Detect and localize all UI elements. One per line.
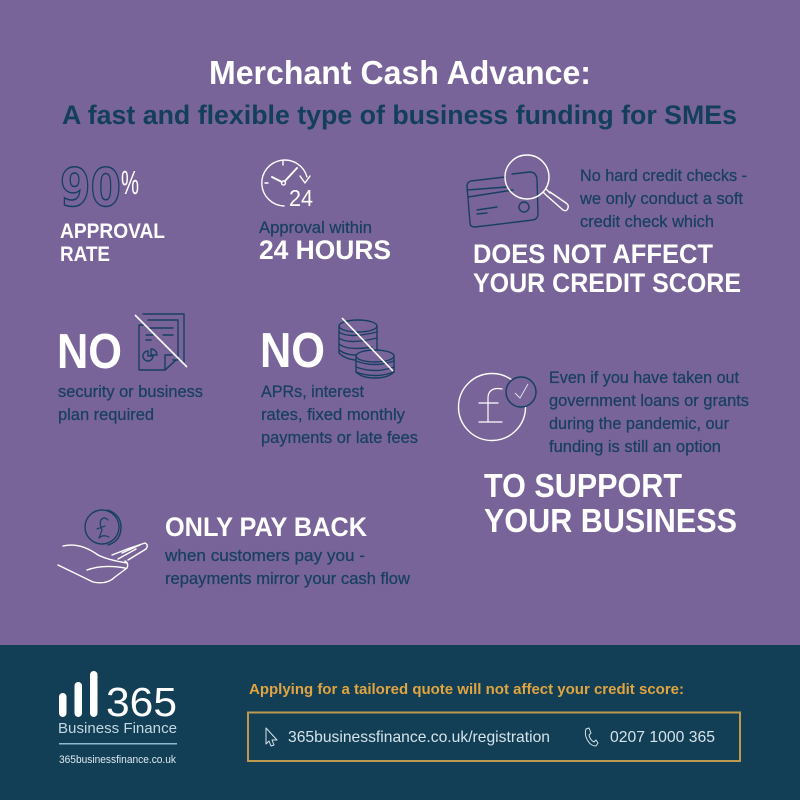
logo: 365 Business Finance [58, 671, 177, 766]
logo: 365 Business Finance: 365 [106, 679, 177, 725]
text: when customers pay you [164, 546, 411, 588]
heading: tailored quote: Applying for a tailored quote will not affect your credit score: [249, 681, 684, 698]
text: when customers pay you: when customers pay you - [164, 546, 365, 565]
heading: no: NO [260, 324, 325, 378]
text: security or business plan required: security or business [58, 382, 203, 401]
icon: hand with coin [58, 510, 147, 583]
subtitle: A fast and flexible type of business funding for SMEs [62, 100, 737, 130]
heading: does not affect your credit score: DOES NOT AFFECT [473, 239, 713, 269]
text: APRs, interest, fees [261, 382, 418, 447]
icon: card and magnifying glass [467, 155, 568, 227]
icon: crossed coins [339, 318, 394, 378]
panel: 90% approval rate [60, 158, 165, 266]
title: Merchant Cash Advance: [209, 54, 591, 91]
panel: credit score [467, 155, 747, 298]
text: even if you have taken out [549, 368, 749, 456]
text: even if you have taken out: funding is still an option [549, 437, 721, 456]
panel: government loans [458, 368, 749, 539]
text: security or business plan required: plan required [58, 405, 154, 424]
text: no hard credit checks [579, 166, 747, 231]
stat: 90%: % [121, 164, 139, 201]
icon: phone [585, 728, 598, 746]
text: approval within: Approval within [259, 218, 372, 237]
icon: pound with check [458, 374, 536, 440]
text: security or business plan required [58, 382, 203, 424]
text: even if you have taken out: during the pandemic, our [549, 414, 729, 433]
panel: no security [57, 314, 203, 424]
panel: footer [0, 645, 800, 800]
heading: does not affect your credit score: YOUR CREDIT SCORE [473, 268, 741, 298]
heading: no: NO [57, 325, 122, 379]
text: no hard credit checks: No hard credit checks - [580, 166, 747, 185]
heading: only pay back: ONLY PAY BACK [165, 512, 367, 542]
heading: approval rate: RATE [60, 243, 110, 266]
icon: logo bars [59, 671, 98, 717]
logo: 365 Business Finance: Business Finance [58, 720, 177, 737]
text: APRs, interest, fees: payments or late fees [261, 428, 418, 447]
text: no hard credit checks: we only conduct a soft [579, 189, 743, 208]
heading: to support your business: TO SUPPORT [484, 467, 682, 504]
text: even if you have taken out: Even if you have taken out [549, 368, 739, 387]
contact box [248, 712, 740, 761]
heading: approval rate: APPROVAL [60, 220, 165, 243]
heading: 24 hours: 24 HOURS [259, 235, 391, 265]
text: APRs, interest, fees: APRs, interest [261, 382, 364, 401]
heading: approval rate [60, 220, 165, 266]
text: registration url: 365businessfinance.co.uk/registration [288, 729, 550, 746]
panel: no APRs [260, 318, 418, 447]
text: APRs, interest, fees: rates, fixed monthly [261, 405, 405, 424]
heading: does not affect your credit score [473, 239, 741, 298]
panel: approval within 24 hours [259, 160, 391, 265]
text: phone number: 0207 1000 365 [610, 729, 715, 746]
logo: 365 Business Finance: 365businessfinance.co.uk [59, 754, 176, 766]
icon: clock: 24 [289, 185, 313, 211]
text: when customers pay you: repayments mirror your cash flow [165, 569, 411, 588]
heading: to support your business: YOUR BUSINESS [484, 502, 737, 539]
text: no hard credit checks: credit check which [580, 212, 714, 231]
icon: cursor [266, 728, 277, 746]
panel: only pay back [58, 510, 411, 588]
heading: to support your business [484, 467, 737, 539]
text: even if you have taken out: government loans or grants [549, 391, 749, 410]
stat: 90%: 90 [60, 158, 121, 219]
icon: crossed document [135, 314, 187, 370]
